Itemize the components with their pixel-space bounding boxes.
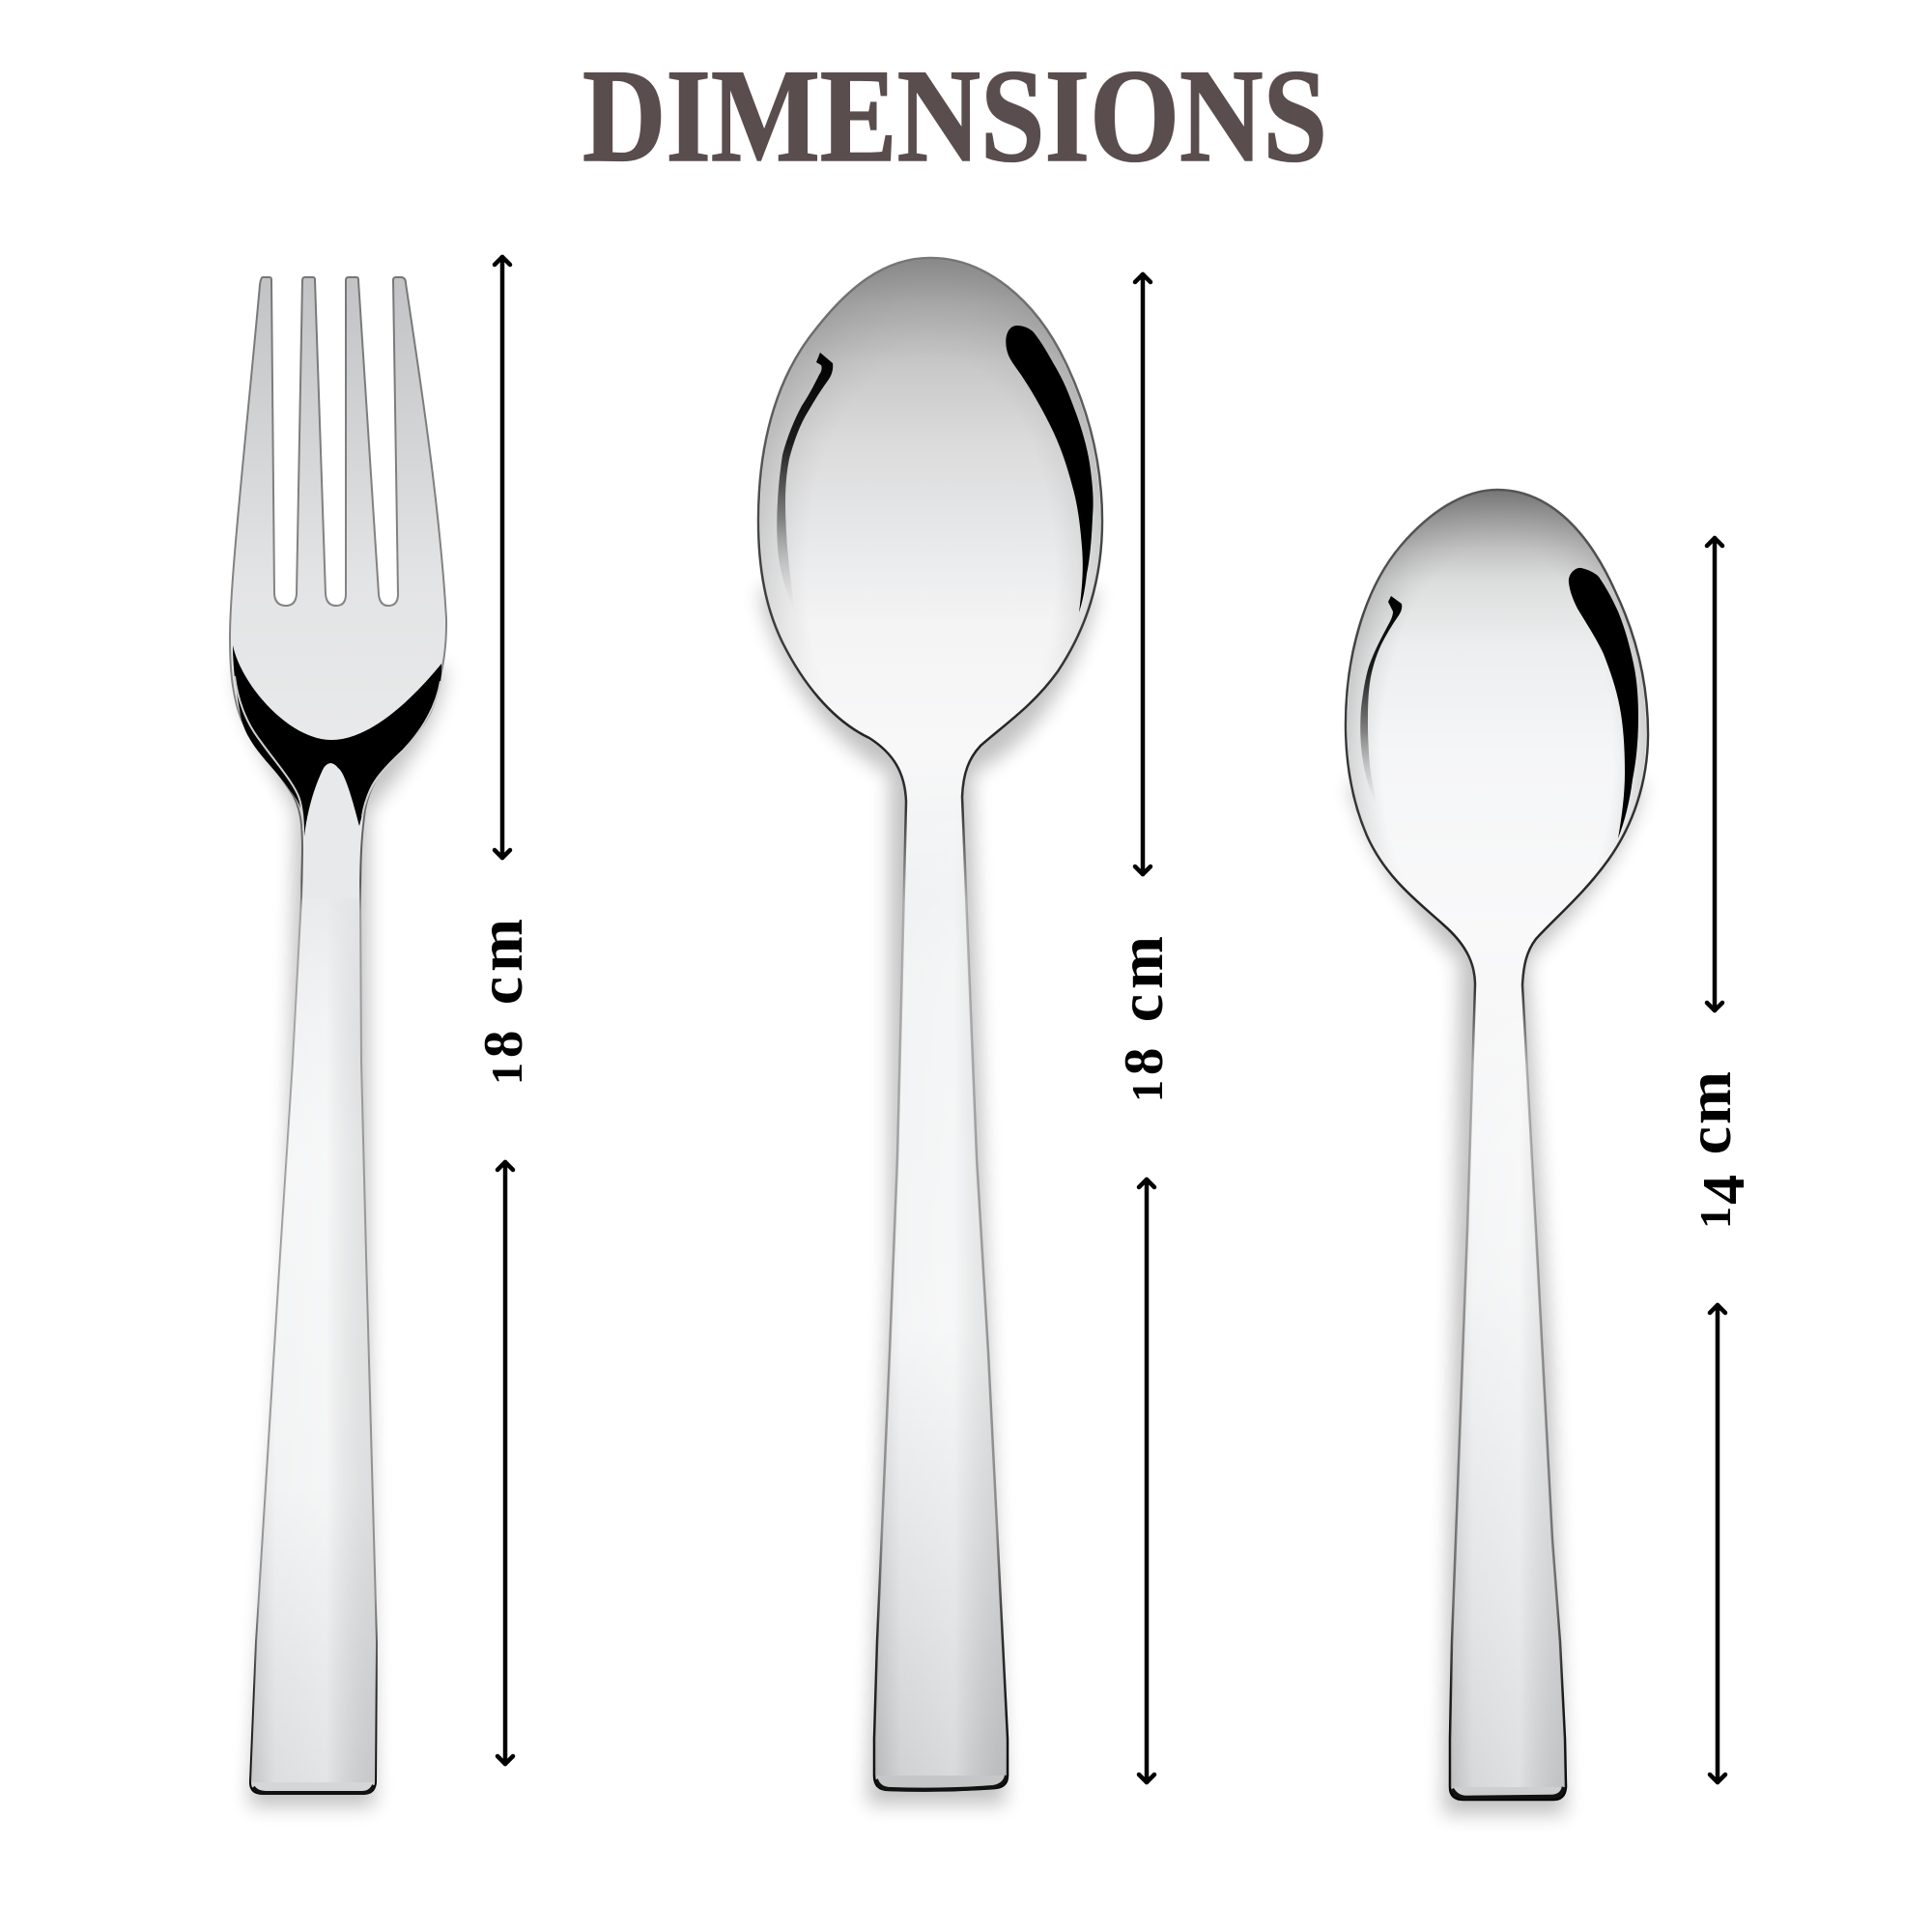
large spoon handle sheen [874,797,1008,1776]
large spoon bowl shading [760,264,1100,668]
fork bottom edge [253,1785,374,1793]
label: small spoon length: cm [1674,1071,1745,1173]
panel: small spoon [1346,490,1648,1814]
arrow: small spoon upper [1707,538,1722,1010]
small spoon shadow [1349,782,1643,1814]
small spoon left reflection [1360,596,1402,805]
label: small spoon length: 1 [1690,1207,1740,1229]
small spoon right reflection [1569,568,1638,838]
panel: large spoon [758,258,1102,1804]
large spoon right reflection [1006,326,1094,612]
arrow: large spoon lower [1139,1179,1154,1782]
label: small spoon length: 4 [1691,1175,1757,1205]
large spoon left reflection [777,353,833,609]
fork handle sheen [250,898,377,1782]
title: DIMENSIONS [582,42,1327,189]
fork rim highlight [235,676,440,831]
arrow: fork upper [495,257,510,858]
small spoon silhouette [1346,490,1648,1800]
label: large spoon length: 18 cm [1106,936,1177,1102]
arrow: large spoon upper [1135,274,1151,874]
panel: fork [230,277,446,1806]
large spoon bottom edge [876,1776,1007,1790]
label: fork length: 18 cm [466,919,536,1085]
small spoon handle sheen [1450,985,1566,1787]
large spoon shadow [759,589,1097,1804]
large spoon silhouette [758,258,1102,1791]
small spoon bowl shading [1348,510,1646,864]
small spoon bottom edge [1452,1787,1564,1798]
arrow: fork lower [497,1162,513,1764]
arrow: small spoon lower [1710,1305,1725,1782]
fork silhouette [230,277,446,1794]
fork shadow [238,667,445,1806]
fork black reflection [233,645,441,837]
